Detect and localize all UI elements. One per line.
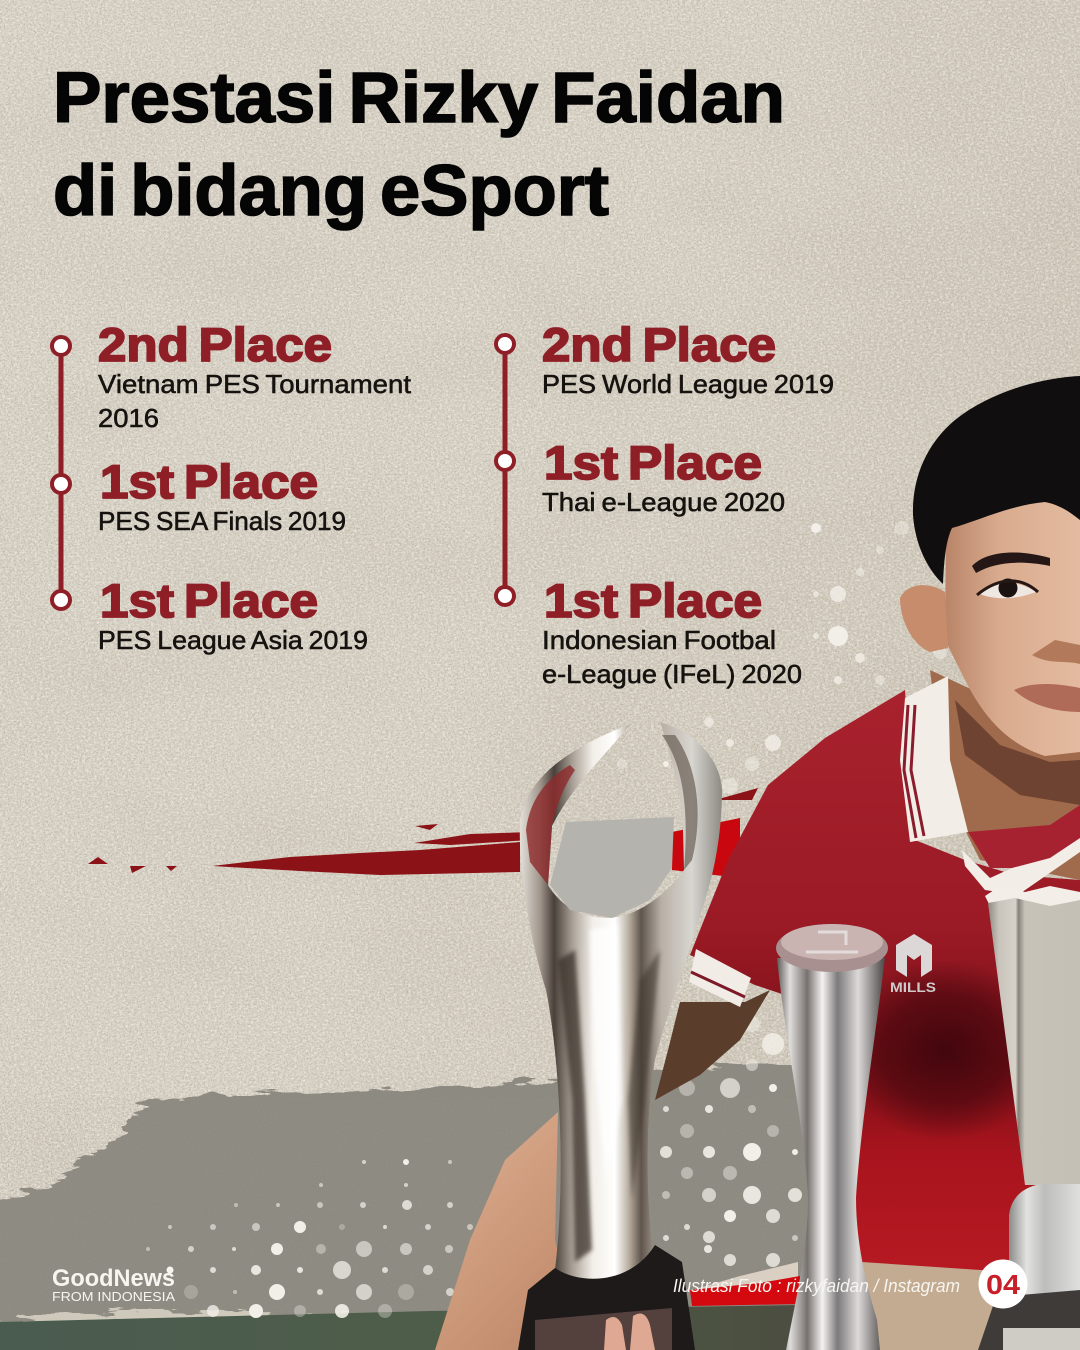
table surface — [0, 1298, 1080, 1350]
achievement: 1st Place SEA Finals: 1st Place — [100, 455, 318, 508]
timeline: left column — [52, 337, 70, 609]
photo credit: Ilustrasi Foto : rizkyfaidan / Instagram — [673, 1276, 960, 1296]
achievement: 2nd Place Vietnam: 2nd Place — [98, 318, 332, 371]
trophy: slim silver — [776, 924, 888, 1350]
page number — [978, 1260, 1028, 1308]
achievement: 1st Place Indonesian Football: 1st Place — [544, 574, 762, 627]
achievement: 1st Place Thai e-League: 1st Place — [544, 436, 762, 489]
achievement: 1st Place Thai e-League: Thai e-League 2020 — [542, 487, 785, 517]
achievement: 2nd Place World League: 2nd Place — [542, 318, 776, 371]
fingers — [604, 1313, 655, 1350]
engraved plate — [550, 817, 674, 918]
logo: GoodNews from Indonesia: GoodNews — [52, 1265, 175, 1292]
right prong interior — [662, 735, 698, 870]
achievement: 2nd Place World League: PES World League 2019 — [542, 369, 834, 399]
halftone dots — [146, 521, 947, 1318]
face — [945, 480, 1080, 756]
base plate — [535, 1308, 672, 1350]
sleeve cuff — [689, 949, 751, 1007]
nose — [1032, 640, 1080, 664]
arm — [655, 990, 770, 1100]
red brush stroke — [88, 788, 758, 878]
logo: Mills — [890, 934, 936, 995]
trophy: large silver — [518, 722, 722, 1350]
achievement: 1st Place Indonesian Football: Indonesian Footbal — [542, 625, 776, 655]
collar — [900, 676, 1080, 895]
trousers — [850, 1248, 1010, 1350]
trophy: large right — [978, 886, 1080, 1350]
achievement: 1st Place SEA Finals — [98, 455, 346, 536]
shirt — [690, 690, 1080, 1285]
logo: GoodNews from Indonesia — [52, 1265, 175, 1304]
hair — [913, 376, 1080, 584]
logo: Mills: MILLS — [890, 979, 936, 995]
logo: GoodNews from Indonesia: FROM INDONESIA — [52, 1289, 175, 1304]
neck — [930, 670, 1080, 880]
lips — [1014, 684, 1080, 712]
red brush behind photo credit — [690, 1262, 800, 1306]
person: Rizky Faidan — [655, 376, 1080, 1350]
title — [53, 59, 785, 231]
title: Prestasi Rizky Faidan — [53, 59, 785, 138]
eye — [977, 578, 1038, 598]
achievement: 1st Place SEA Finals: PES SEA Finals 2019 — [98, 506, 346, 536]
achievement: 1st Place League Asia: PES League Asia 2019 — [98, 625, 368, 655]
cup and stem — [520, 722, 722, 1281]
inner cup shading — [526, 765, 575, 885]
hand holding trophy — [435, 1112, 660, 1350]
grey brush stroke band — [0, 1060, 880, 1322]
achievement: 1st Place Indonesian Football: e-League (IFeL) 2020 — [542, 659, 802, 689]
paper flecks along bottom of band — [20, 1308, 300, 1324]
achievement: 1st Place Thai e-League — [542, 436, 785, 517]
ear — [900, 585, 948, 652]
achievement: 2nd Place Vietnam: Vietnam PES Tournament — [98, 369, 412, 399]
achievement: 1st Place League Asia — [98, 574, 368, 655]
page number: 04 — [986, 1269, 1020, 1300]
title: di bidang eSport — [53, 152, 609, 231]
achievement: 1st Place Indonesian Football — [542, 574, 802, 689]
eyebrow — [972, 552, 1050, 573]
stem highlights — [590, 925, 622, 1180]
achievement: 2nd Place Vietnam: 2016 — [98, 403, 159, 433]
achievement: 2nd Place World League — [542, 318, 834, 399]
achievement: 2nd Place Vietnam — [98, 318, 412, 433]
base — [518, 1245, 695, 1350]
timeline: right column — [496, 335, 514, 605]
achievement: 1st Place League Asia: 1st Place — [100, 574, 318, 627]
